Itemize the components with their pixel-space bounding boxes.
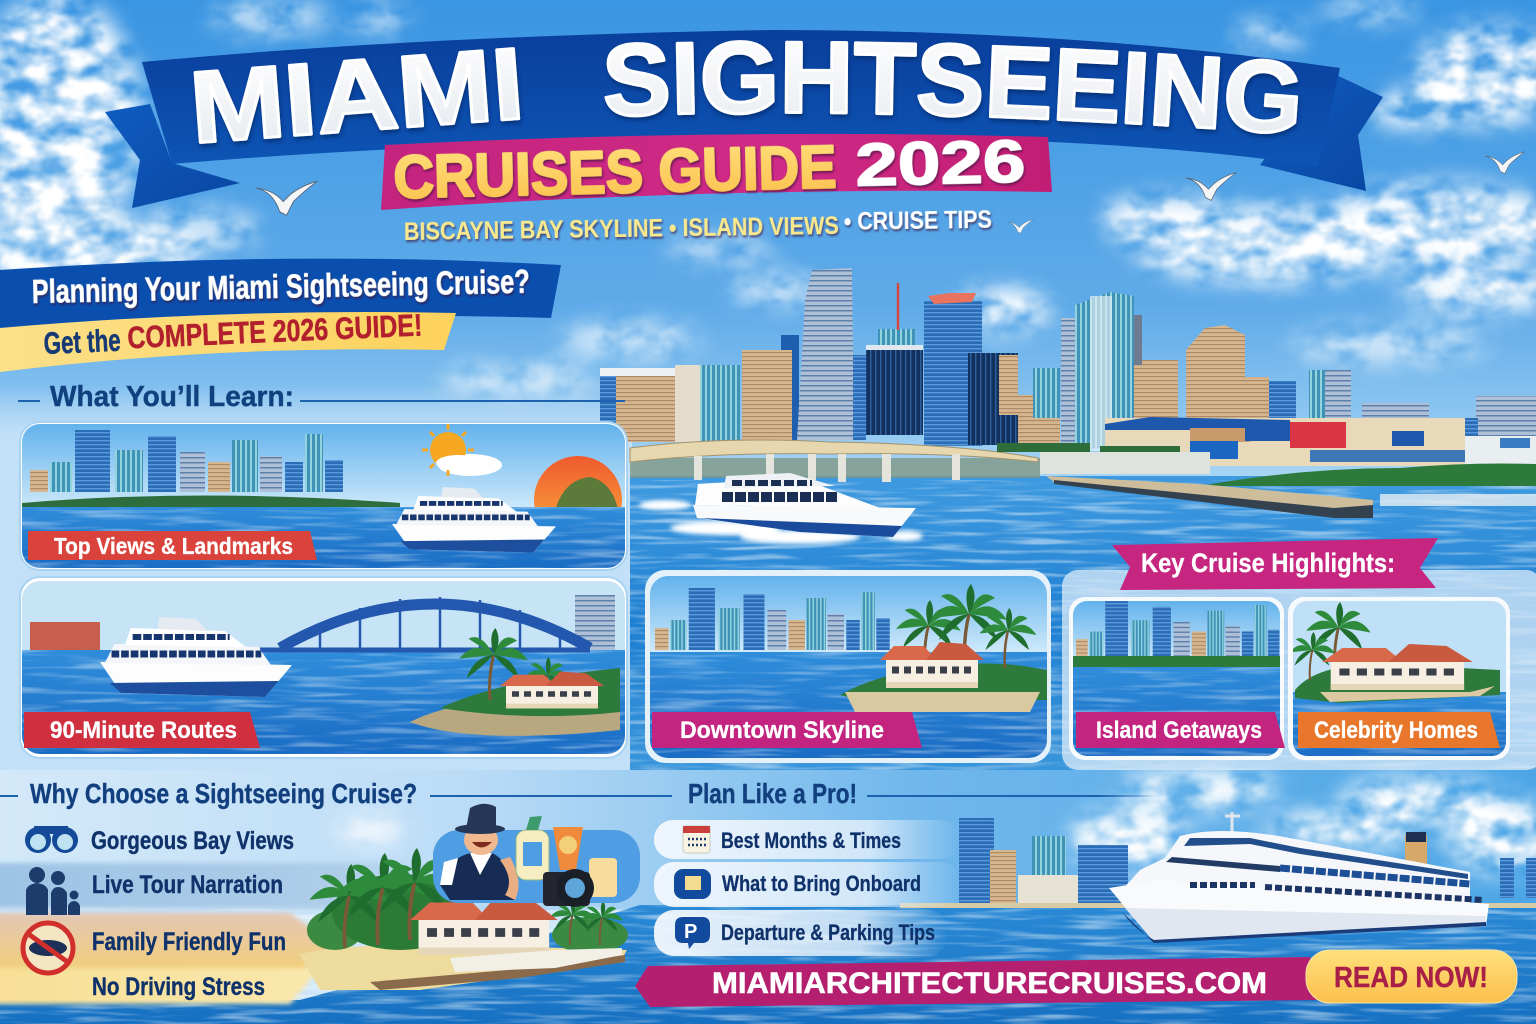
title text MIAMI SIGHTSEEING: MIAMI — [186, 26, 528, 165]
main boat — [639, 473, 923, 544]
read now button — [1306, 950, 1517, 1003]
icon: parking: P — [684, 921, 697, 943]
benefit list: Family Friendly Fun — [92, 928, 286, 956]
subtitle pink ribbon — [381, 134, 1052, 210]
main Miami skyline — [600, 268, 1536, 518]
card: island getaways: Island Getaways — [1096, 717, 1262, 744]
icon: no driving sign — [23, 923, 73, 973]
read now button: READ NOW! — [1334, 962, 1488, 994]
planning tips list — [654, 820, 960, 956]
pier — [1046, 476, 1373, 518]
title text MIAMI SIGHTSEEING — [186, 26, 1301, 165]
planning tips list: What to Bring Onboard — [722, 871, 921, 896]
title text MIAMI SIGHTSEEING: SIGHTSEEING — [604, 40, 1301, 139]
left pale backdrop — [0, 385, 632, 795]
card: celebrity homes: Celebrity Homes — [1314, 717, 1478, 744]
sunscreen — [553, 827, 583, 870]
marina — [1380, 494, 1536, 506]
banner: planning your cruise: Planning Your Miami Sightseeing Cruise? — [31, 263, 530, 310]
bridge arch — [260, 597, 590, 650]
bottle — [516, 816, 549, 880]
clouds — [0, 0, 1536, 394]
website banner: MIAMIARCHITECTURECRUISES.COM — [712, 967, 1267, 1000]
distant skyline — [900, 818, 1536, 908]
island with villa — [299, 848, 628, 990]
planning tips list: Best Months & Times — [721, 828, 901, 853]
camera — [543, 869, 594, 907]
label: top views: Top Views & Landmarks — [54, 533, 293, 559]
website banner — [635, 957, 1320, 1007]
banner: complete 2026 guide — [0, 307, 456, 372]
arena — [1105, 418, 1465, 466]
panel: 90-minute routes — [20, 577, 627, 758]
panel: downtown skyline — [645, 570, 1051, 763]
icon: family silhouettes — [26, 867, 80, 915]
benefit list: No Driving Stress — [92, 973, 265, 1001]
label: downtown — [652, 712, 922, 748]
label: routes: 90-Minute Routes — [50, 717, 237, 744]
label: routes — [24, 712, 260, 748]
heading: Plan Like a Pro: Plan Like a Pro! — [688, 778, 857, 809]
trees — [997, 443, 1180, 452]
bottom sky band — [0, 770, 1536, 910]
title ribbon — [105, 30, 1383, 208]
large cruise ship — [1109, 812, 1489, 943]
banner: planning your cruise — [0, 259, 561, 328]
card: celebrity homes — [1288, 597, 1510, 760]
benefit list: Gorgeous Bay Views — [91, 827, 294, 855]
island — [410, 628, 620, 736]
panel: key cruise highlights — [1062, 538, 1536, 770]
icon: seagulls — [256, 152, 1525, 233]
glass — [589, 858, 617, 897]
panel: top views and landmarks — [20, 422, 627, 570]
ribbon body — [142, 30, 1340, 166]
bottom right clouds — [335, 770, 1536, 873]
water ripples — [0, 480, 1536, 1024]
icon: sun — [422, 424, 474, 476]
icon: backpack — [674, 869, 711, 899]
sunset island — [534, 456, 622, 507]
heading banner: Key Cruise Highlights: — [1141, 548, 1395, 578]
bottom water — [0, 905, 1536, 1024]
benefit list — [23, 826, 294, 1001]
guide — [440, 804, 519, 900]
icon: binoculars — [25, 826, 78, 853]
bay water — [630, 476, 1536, 776]
heading: Why Choose: Why Choose a Sightseeing Cruise? — [30, 778, 417, 809]
icon: calendar — [683, 826, 710, 853]
banner: complete 2026 guide: COMPLETE 2026 GUIDE! — [127, 307, 423, 355]
tagline: BISCAYNE BAY SKYLINE • ISLAND VIEWS — [404, 212, 839, 246]
subtitle: Cruises Guide 2026: 2026 — [855, 128, 1026, 199]
benefit list: Live Tour Narration — [92, 871, 283, 899]
banner: complete 2026 guide: Get the — [43, 323, 121, 361]
card: island getaways — [1069, 597, 1285, 760]
icon: parking — [675, 917, 710, 949]
label: downtown: Downtown Skyline — [680, 717, 884, 744]
tagline: • CRUISE TIPS — [844, 206, 992, 236]
illustration: tour guide with gear — [433, 804, 640, 907]
benefit bands — [0, 863, 430, 1004]
heading: What You'll Learn: What You’ll Learn: — [50, 381, 294, 413]
right ribbon tail — [1260, 72, 1383, 191]
heading banner — [1112, 538, 1438, 590]
island — [840, 584, 1047, 712]
planning tips list: Departure & Parking Tips — [721, 920, 935, 945]
left ribbon tail — [105, 104, 240, 208]
bridge — [630, 458, 1040, 478]
subtitle: Cruises Guide 2026: CRUISES GUIDE — [393, 133, 837, 211]
